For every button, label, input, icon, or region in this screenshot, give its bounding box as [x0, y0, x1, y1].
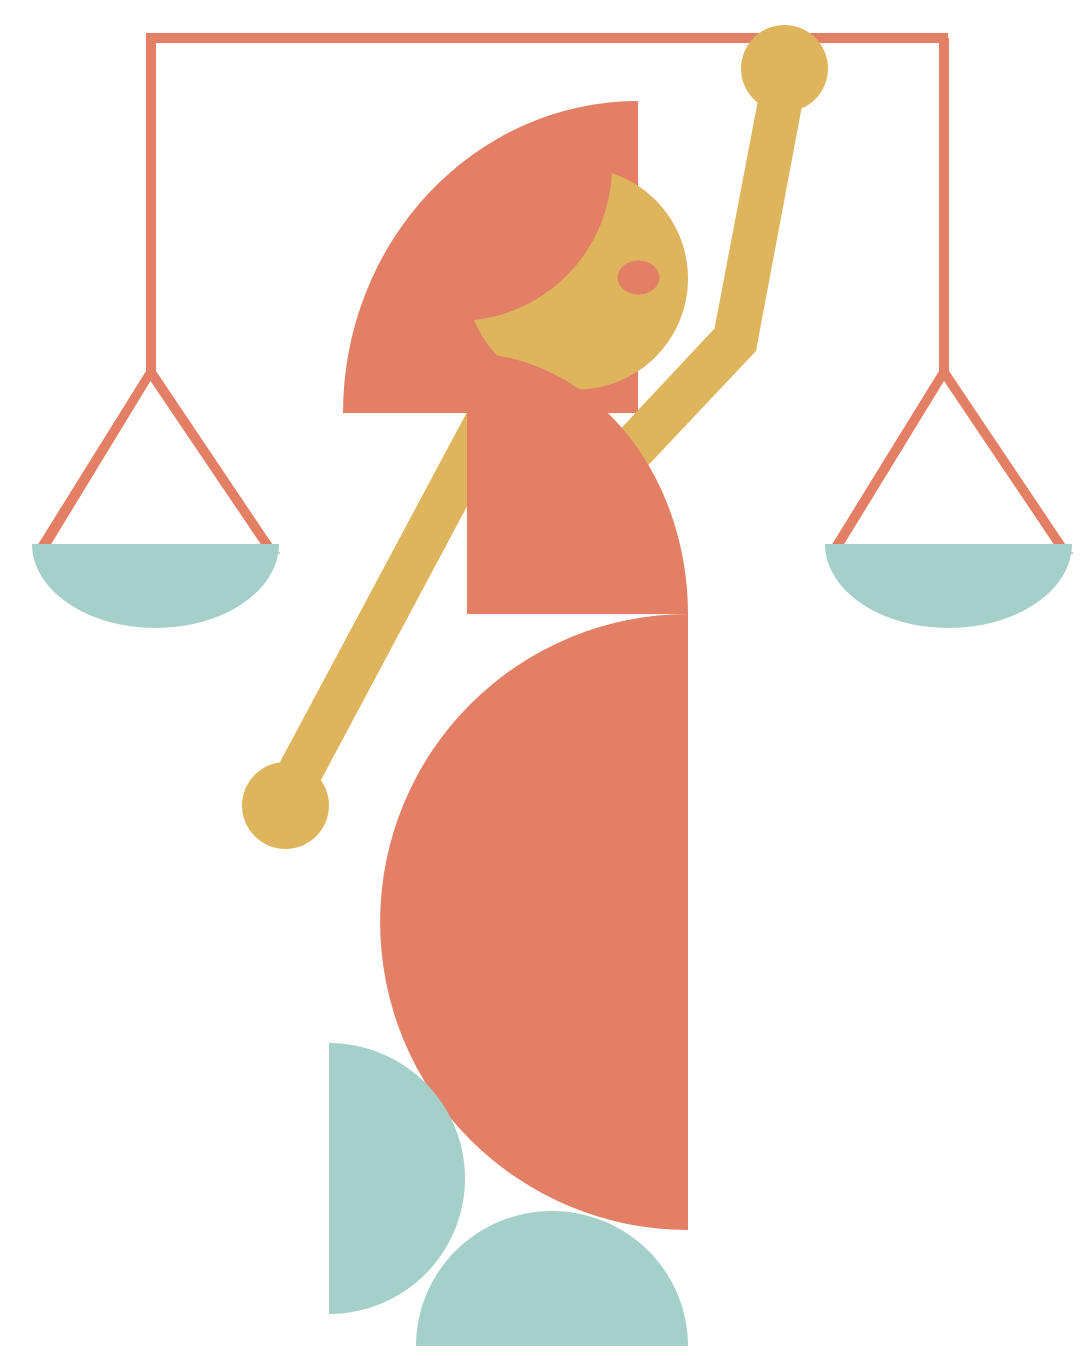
eye — [618, 260, 660, 294]
left hand — [242, 762, 329, 849]
left pan — [32, 544, 280, 628]
right hanging rod — [939, 38, 949, 375]
left foot — [329, 1043, 465, 1314]
lowered left arm — [280, 412, 480, 780]
right pan strings — [831, 371, 1066, 546]
scale beam — [146, 33, 949, 43]
hair — [343, 101, 638, 413]
skirt — [380, 614, 688, 1230]
right scale pan assembly — [825, 38, 1073, 628]
raised right arm — [612, 100, 802, 474]
left pan strings — [37, 371, 274, 546]
scales — [32, 33, 1073, 628]
torso — [467, 353, 688, 614]
figure — [242, 25, 828, 1346]
right foot — [416, 1211, 688, 1346]
right hand — [741, 25, 828, 112]
left hanging rod — [146, 33, 156, 375]
hair bangs — [457, 166, 612, 321]
head — [466, 168, 688, 390]
right pan — [825, 544, 1073, 628]
left scale pan assembly — [32, 33, 280, 628]
